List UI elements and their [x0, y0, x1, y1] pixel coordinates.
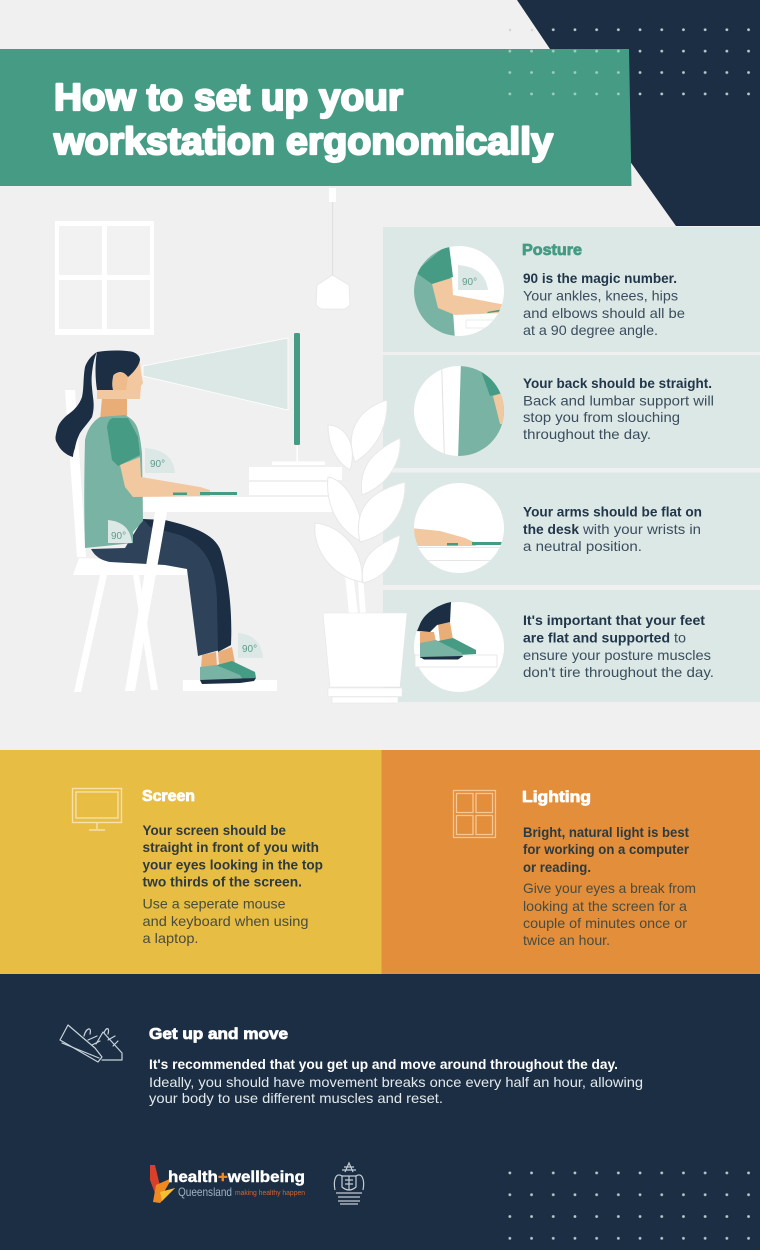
- panel: posture: [383, 227, 760, 352]
- ankles: [201, 647, 235, 668]
- shoes: [200, 661, 256, 684]
- feet text: to: [674, 630, 686, 646]
- hair: [96, 350, 140, 390]
- posture text: [523, 270, 685, 338]
- back circle: [414, 366, 504, 456]
- lighting text: looking at the screen for a: [523, 898, 687, 914]
- panel: lighting: [382, 750, 760, 974]
- posture text: 90 is the magic number.: [523, 270, 677, 286]
- 90 degree label: 90°: [462, 277, 477, 288]
- panel: get up and move: [0, 974, 760, 1250]
- heading: lighting: Lighting: [522, 789, 591, 806]
- plant: [315, 400, 405, 614]
- feet text: [523, 612, 714, 680]
- person: [56, 350, 256, 684]
- feet text: ensure your posture muscles: [523, 647, 711, 663]
- back text: Back and lumbar support will: [523, 392, 714, 408]
- feet text: It's important that your feet: [523, 612, 705, 628]
- title: How to set up your: [54, 77, 403, 119]
- lighting text: [523, 824, 696, 948]
- heading: posture: Posture: [522, 242, 582, 259]
- heading: get up and move: Get up and move: [149, 1026, 288, 1043]
- back text: stop you from slouching: [523, 409, 680, 425]
- posture text: Your ankles, knees, hips: [523, 288, 678, 304]
- arms text: Your arms should be flat on: [523, 504, 702, 520]
- desk: [125, 497, 332, 691]
- posture elbow circle: [414, 246, 504, 336]
- screen text: [142, 822, 323, 946]
- 90 degree markers: 90°: [150, 459, 165, 470]
- neck: [100, 398, 127, 420]
- move text: It's recommended that you get up and move around throughout the day.: [149, 1056, 618, 1072]
- window: [55, 221, 154, 335]
- logo mark: [150, 1165, 175, 1203]
- 90 degree markers: 90°: [242, 644, 257, 655]
- shirt: [84, 415, 143, 548]
- logo: health and wellbeing Queensland: making healthy happen: [235, 1190, 305, 1197]
- navy corner shape with dots: [509, 0, 760, 226]
- 90 degree markers: [108, 448, 263, 658]
- ponytail: [56, 352, 97, 457]
- footrest: [183, 680, 277, 691]
- view cone: [143, 338, 288, 410]
- move text: Ideally, you should have movement breaks once every half an hour, allowing: [149, 1074, 643, 1090]
- title: workstation ergonomically: [53, 121, 553, 163]
- lighting text: Bright, natural light is best: [523, 824, 689, 840]
- lighting text: couple of minutes once or: [523, 915, 687, 931]
- lighting text: or reading.: [523, 859, 591, 875]
- arms text: with your wrists in: [582, 521, 701, 537]
- screen text: Your screen should be: [142, 822, 286, 838]
- panel: screen: [0, 750, 382, 974]
- chair: [65, 390, 187, 692]
- screen text: straight in front of you with: [142, 839, 319, 855]
- posture text: and elbows should all be: [523, 305, 685, 321]
- icon: window: [454, 790, 496, 838]
- logo: health and wellbeing Queensland: Queensland: [178, 1185, 232, 1199]
- back text: [523, 375, 714, 442]
- keyboard and mouse: [173, 492, 237, 495]
- feet text: don't tire throughout the day.: [523, 664, 714, 680]
- sleeve: [107, 418, 140, 466]
- arms text: a neutral position.: [523, 538, 642, 554]
- lighting text: twice an hour.: [523, 932, 610, 948]
- panel: feet: [383, 590, 760, 702]
- back text: throughout the day.: [523, 426, 651, 442]
- screen text: and keyboard when using: [142, 913, 308, 929]
- face: [97, 362, 143, 399]
- heading: screen: Screen: [142, 788, 195, 805]
- arms text: the desk: [523, 521, 579, 537]
- arm: [120, 457, 210, 497]
- move text: your body to use different muscles and reset.: [149, 1090, 443, 1106]
- ear: [113, 373, 128, 390]
- panel: arms: [383, 472, 760, 585]
- feet text: are flat and supported: [523, 630, 670, 646]
- monitor and books: [249, 333, 342, 495]
- icon: shoes: [60, 1025, 122, 1062]
- trouser shadow: [143, 519, 231, 652]
- posture text: at a 90 degree angle.: [523, 322, 658, 338]
- logo: Queensland crest: [334, 1163, 364, 1204]
- back text: Your back should be straight.: [523, 375, 712, 391]
- screen text: your eyes looking in the top: [142, 856, 323, 872]
- feet circle: [414, 602, 504, 692]
- 90 degree markers: 90°: [111, 531, 126, 542]
- panel: back: [383, 355, 760, 468]
- pendant lamp: [316, 188, 350, 309]
- title banner: [0, 41, 632, 186]
- lighting text: Give your eyes a break from: [523, 880, 696, 896]
- arms circle: [410, 483, 510, 573]
- lighting text: for working on a computer: [523, 841, 690, 857]
- screen text: two thirds of the screen.: [142, 874, 302, 890]
- icon: monitor: [72, 788, 122, 830]
- trousers: [91, 519, 220, 656]
- plant pot: [323, 613, 407, 703]
- move text: [149, 1056, 643, 1106]
- logo: health and wellbeing Queensland: [150, 1165, 305, 1203]
- arms text: [523, 504, 702, 554]
- screen text: Use a seperate mouse: [142, 896, 286, 912]
- screen text: a laptop.: [142, 930, 198, 946]
- logo: health and wellbeing Queensland: health+wellbeing: [168, 1169, 305, 1186]
